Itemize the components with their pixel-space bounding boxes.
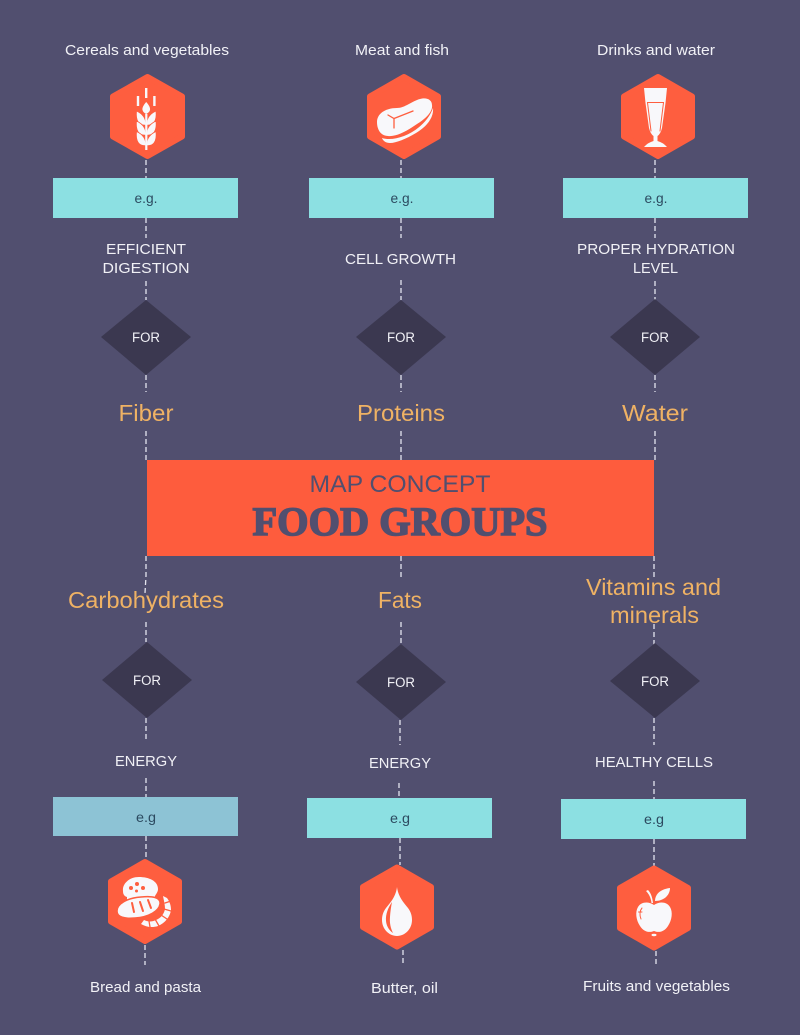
benefit: efficient digestion: DIGESTION [102, 260, 190, 277]
benefit: efficient digestion: EFFICIENT [106, 241, 186, 258]
icon: wheat [113, 77, 182, 156]
benefit: energy: ENERGY [369, 755, 431, 772]
heading: vitamins and minerals [586, 574, 721, 628]
example box [561, 799, 746, 839]
diamond: for: FOR [387, 675, 415, 690]
heading: water: Water [622, 400, 688, 426]
diamond: for [356, 300, 446, 375]
benefit: efficient digestion [102, 241, 190, 277]
column: fiber [53, 42, 238, 426]
heading: vitamins and minerals: minerals [610, 602, 699, 628]
icon: steak [370, 77, 438, 156]
example box [53, 178, 238, 218]
source label: drinks and water: Drinks and water [597, 42, 715, 59]
connector lines [145, 160, 656, 965]
food label: butter, oil: Butter, oil [371, 980, 438, 997]
source label: meat and fish: Meat and fish [355, 42, 449, 59]
central title panel [147, 460, 654, 556]
icon: oil drop [363, 868, 431, 946]
benefit: proper hydration level: LEVEL [633, 260, 678, 277]
diamond: for: FOR [133, 673, 161, 688]
column: water [563, 42, 748, 426]
heading: carbohydrates: Carbohydrates [68, 587, 224, 613]
example text: e.g. [390, 190, 414, 206]
title: FOOD GROUPS [252, 499, 548, 544]
example box [309, 178, 494, 218]
diamond: for [356, 644, 446, 720]
heading: fiber: Fiber [118, 400, 174, 426]
source label: cereals and vegetables: Cereals and vegetables [65, 42, 229, 59]
diamond: for: FOR [132, 330, 160, 345]
diamond: for [101, 300, 191, 375]
heading: vitamins and minerals: Vitamins and [586, 574, 721, 600]
food label: fruits and vegetables: Fruits and vegetables [583, 978, 730, 995]
benefit: proper hydration level: PROPER HYDRATION [577, 241, 735, 258]
benefit: proper hydration level [577, 241, 735, 277]
diamond: for [102, 642, 192, 718]
example box [53, 797, 238, 836]
example box [307, 798, 492, 838]
example text: e.g. [644, 190, 668, 206]
diamond: for [610, 643, 700, 718]
column: carbohydrates [53, 587, 238, 996]
example box [563, 178, 748, 218]
diamond: for: FOR [641, 674, 669, 689]
heading: fats: Fats [378, 587, 422, 613]
heading: proteins: Proteins [357, 400, 445, 426]
diamond: for: FOR [641, 330, 669, 345]
icon: apple [620, 868, 688, 948]
column: proteins [309, 42, 494, 426]
example text: e.g [644, 811, 664, 827]
icon: bread and pasta [111, 862, 179, 941]
example text: e.g. [134, 190, 158, 206]
icon: drink glass [624, 77, 692, 156]
benefit: energy: ENERGY [115, 753, 177, 770]
subtitle: MAP CONCEPT [310, 471, 491, 498]
column: fats [307, 587, 492, 997]
food label: bread and pasta: Bread and pasta [90, 979, 202, 996]
example text: e.g [136, 809, 156, 825]
benefit: healthy cells: HEALTHY CELLS [595, 754, 713, 771]
example text: e.g [390, 810, 410, 826]
diamond: for [610, 299, 700, 375]
diamond: for: FOR [387, 330, 415, 345]
benefit: cell growth: CELL GROWTH [345, 251, 456, 268]
column: vitamins and minerals [561, 574, 746, 995]
